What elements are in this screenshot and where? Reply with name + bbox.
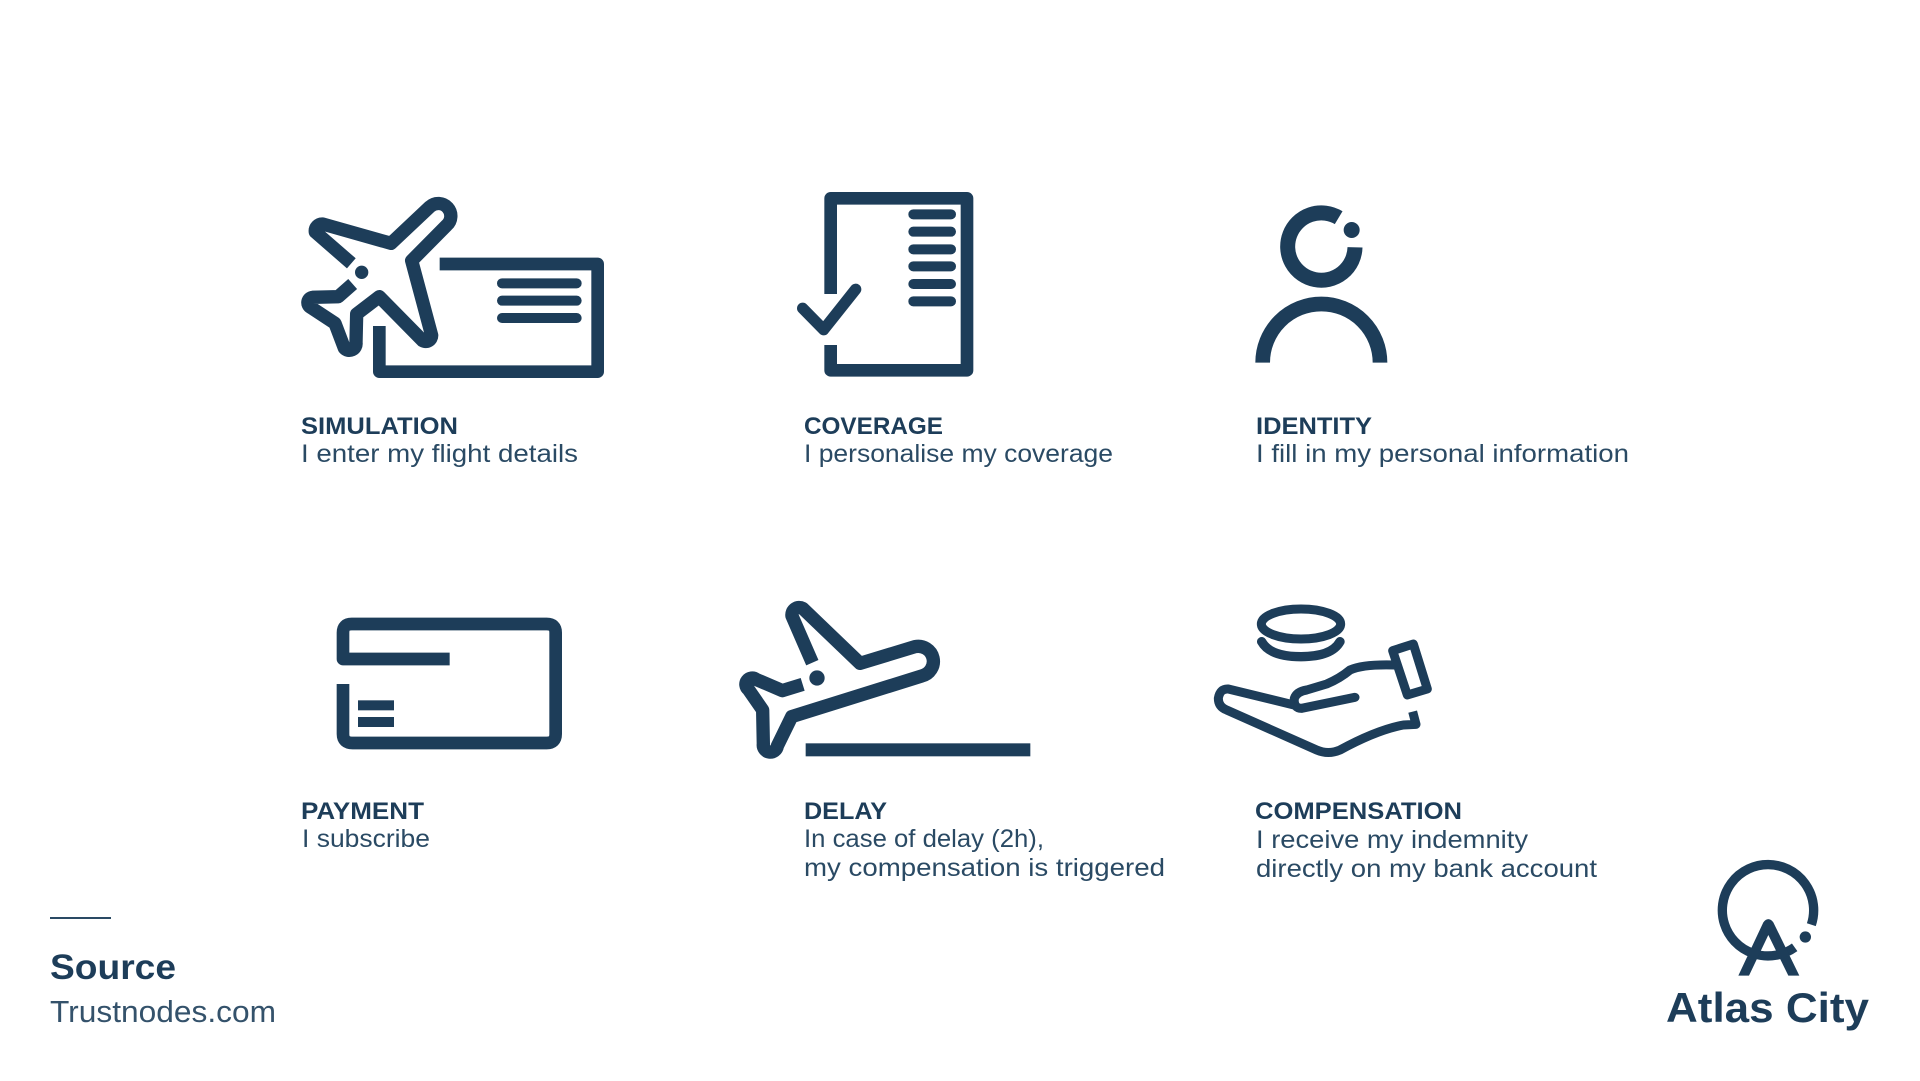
panel: payment <box>301 624 556 853</box>
heading: coverage: COVERAGE <box>804 413 943 440</box>
icon: credit card <box>343 624 556 743</box>
icon: plane and ticket <box>308 203 598 372</box>
text: delay description <box>804 825 1165 882</box>
text: payment description: I subscribe <box>302 825 430 853</box>
panel: compensation <box>1218 609 1597 883</box>
icon: hand and coins <box>1218 609 1427 752</box>
icon: plane taking off <box>746 607 1030 756</box>
heading: identity: IDENTITY <box>1256 413 1372 440</box>
text: logo wordmark: Atlas City <box>1666 984 1870 1031</box>
text: compensation description: I receive my indemnity <box>1256 826 1529 854</box>
panel: simulation <box>301 203 598 468</box>
text: compensation description: directly on my bank account <box>1256 855 1597 883</box>
icon: document with check <box>803 198 967 370</box>
text: identity description: I fill in my personal information <box>1256 440 1629 468</box>
text: simulation description: I enter my flight details <box>301 440 578 468</box>
logo: Atlas City <box>1666 865 1870 1031</box>
text: compensation description <box>1256 826 1597 883</box>
panel: coverage <box>803 198 1113 468</box>
heading: compensation: COMPENSATION <box>1255 798 1462 825</box>
heading: simulation: SIMULATION <box>301 413 458 440</box>
panel: identity <box>1256 213 1629 468</box>
text: source name: Trustnodes.com <box>50 994 276 1029</box>
source block <box>50 917 276 1029</box>
text: delay description: my compensation is triggered <box>804 854 1165 882</box>
heading: source: Source <box>50 948 176 987</box>
heading: delay: DELAY <box>804 798 887 825</box>
text: delay description: In case of delay (2h), <box>804 825 1044 853</box>
text: coverage description: I personalise my coverage <box>804 440 1113 468</box>
panel: delay <box>746 607 1165 882</box>
icon: logo mark <box>1722 865 1814 976</box>
heading: payment: PAYMENT <box>301 798 424 825</box>
icon: person <box>1263 213 1380 363</box>
